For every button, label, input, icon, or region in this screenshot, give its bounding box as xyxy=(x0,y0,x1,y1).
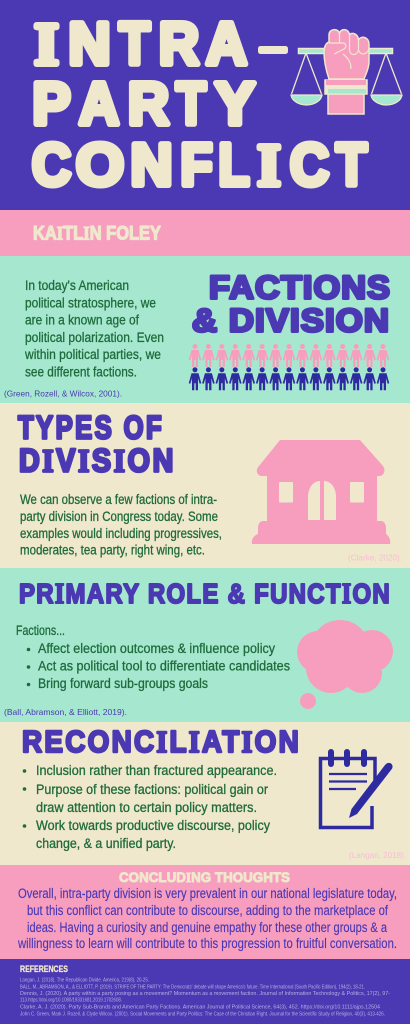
panel: title header xyxy=(0,0,410,210)
citation: (Clarke, 2020). xyxy=(348,552,402,562)
reference list xyxy=(20,978,390,1018)
factions list: Factions... xyxy=(16,623,65,638)
reference list: Langan, J. (2018). The Republican Divide. America, 219(8), 20-25. xyxy=(20,978,149,984)
intro text xyxy=(24,278,164,379)
title: R xyxy=(128,71,169,137)
citation: (Langan, 2018). xyxy=(349,850,406,860)
heading: references: REFERENCES xyxy=(20,964,68,974)
title: R xyxy=(159,11,199,77)
reference list: 113.https://doi.org/10.1080/19331681.2019.1702608. xyxy=(20,998,122,1004)
title: L xyxy=(218,132,250,198)
heading: reconciliation: RECONCILIATION xyxy=(22,724,301,759)
icon: thought cloud xyxy=(297,620,393,709)
heading: types of division xyxy=(18,410,176,478)
title: T xyxy=(176,71,206,137)
heading: factions and division xyxy=(192,270,391,338)
citation: (Ball, Abramson, & Elliott, 2019). xyxy=(4,707,127,717)
intro text: political polarization. Even xyxy=(25,330,164,345)
body text: moderates, tea party, right wing, etc. xyxy=(20,542,205,558)
panel: author band xyxy=(0,210,410,256)
title: O xyxy=(76,132,124,198)
title: N xyxy=(68,11,110,77)
body text: examples would including progressives, xyxy=(20,526,222,541)
title: P xyxy=(32,71,70,137)
bullet list: Purpose of these factions: political gain or xyxy=(36,782,268,797)
intro text: In today's American xyxy=(25,278,129,293)
bullet list: change, & a unified party. xyxy=(36,836,176,851)
panel: reconciliation xyxy=(0,722,410,865)
bullet list xyxy=(23,763,277,851)
title: T xyxy=(336,132,367,198)
icon: row of pink people xyxy=(189,344,389,367)
intro text: political stratosphere, we xyxy=(25,295,156,310)
title xyxy=(32,11,367,198)
body text xyxy=(20,492,222,558)
intro text: are in a known age of xyxy=(25,313,139,328)
title: C xyxy=(32,132,71,198)
reference list: Clarke, A. J. (2020). Party Sub-Brands and American Party Factions. American Journal of Political Science, 64(3), 452. https://doi.org/10.1111/ajps.12504 xyxy=(20,1004,380,1010)
factions list: Act as political tool to differentiate candidates xyxy=(38,658,290,674)
bullet list: Inclusion rather than fractured appearance. xyxy=(36,763,277,778)
title: I xyxy=(258,132,280,198)
icon: fist holding scales xyxy=(291,30,402,114)
panel: factions and division xyxy=(0,256,410,403)
citation: (Green, Rozell, & Wilcox, 2001). xyxy=(4,388,122,398)
bullet list: Work towards productive discourse, policy xyxy=(36,818,270,833)
icon: capitol building xyxy=(252,440,390,544)
title: N xyxy=(130,132,172,198)
panel: concluding thoughts xyxy=(0,865,410,959)
panel: references xyxy=(0,959,410,1024)
title: I xyxy=(34,11,58,77)
factions list: Bring forward sub-groups goals xyxy=(38,676,208,691)
title: A xyxy=(79,71,119,137)
icon: notepad and pencil xyxy=(320,752,393,828)
author name: KAITLIN FOLEY xyxy=(33,224,161,244)
body text: party division in Congress today. Some xyxy=(20,509,218,524)
factions list: Affect election outcomes & influence policy xyxy=(38,641,275,656)
title: A xyxy=(206,11,247,77)
heading: types of division: DIVISION xyxy=(19,442,176,478)
title: F xyxy=(180,132,212,198)
panel: types of division xyxy=(0,403,410,568)
intro text: within political parties, we xyxy=(24,347,161,362)
icon: row of navy people xyxy=(189,367,389,390)
title: Y xyxy=(215,71,255,137)
bullet list: draw attention to certain policy matters. xyxy=(36,800,257,815)
reference list: Dennis, J. (2020). A party within a party posing as a movement? Momentum as a movement faction. Journal of Information Technology & Politics, 17(2), 97- xyxy=(20,991,390,997)
intro text: see different factions. xyxy=(25,364,137,379)
panel: primary role and function xyxy=(0,568,410,722)
heading: types of division: TYPES OF xyxy=(18,410,164,446)
title: T xyxy=(119,11,150,77)
title: C xyxy=(290,132,329,198)
heading: concluding thoughts: CONCLUDING THOUGHTS xyxy=(119,869,290,886)
body text: We can observe a few factions of intra- xyxy=(20,492,217,507)
heading: factions and division: & DIVISION xyxy=(192,302,390,338)
heading: factions and division: FACTIONS xyxy=(209,270,391,306)
heading: primary role and function: PRIMARY ROLE & FUNCTION xyxy=(19,578,391,610)
factions list xyxy=(16,623,290,691)
conclusion text xyxy=(17,886,397,951)
